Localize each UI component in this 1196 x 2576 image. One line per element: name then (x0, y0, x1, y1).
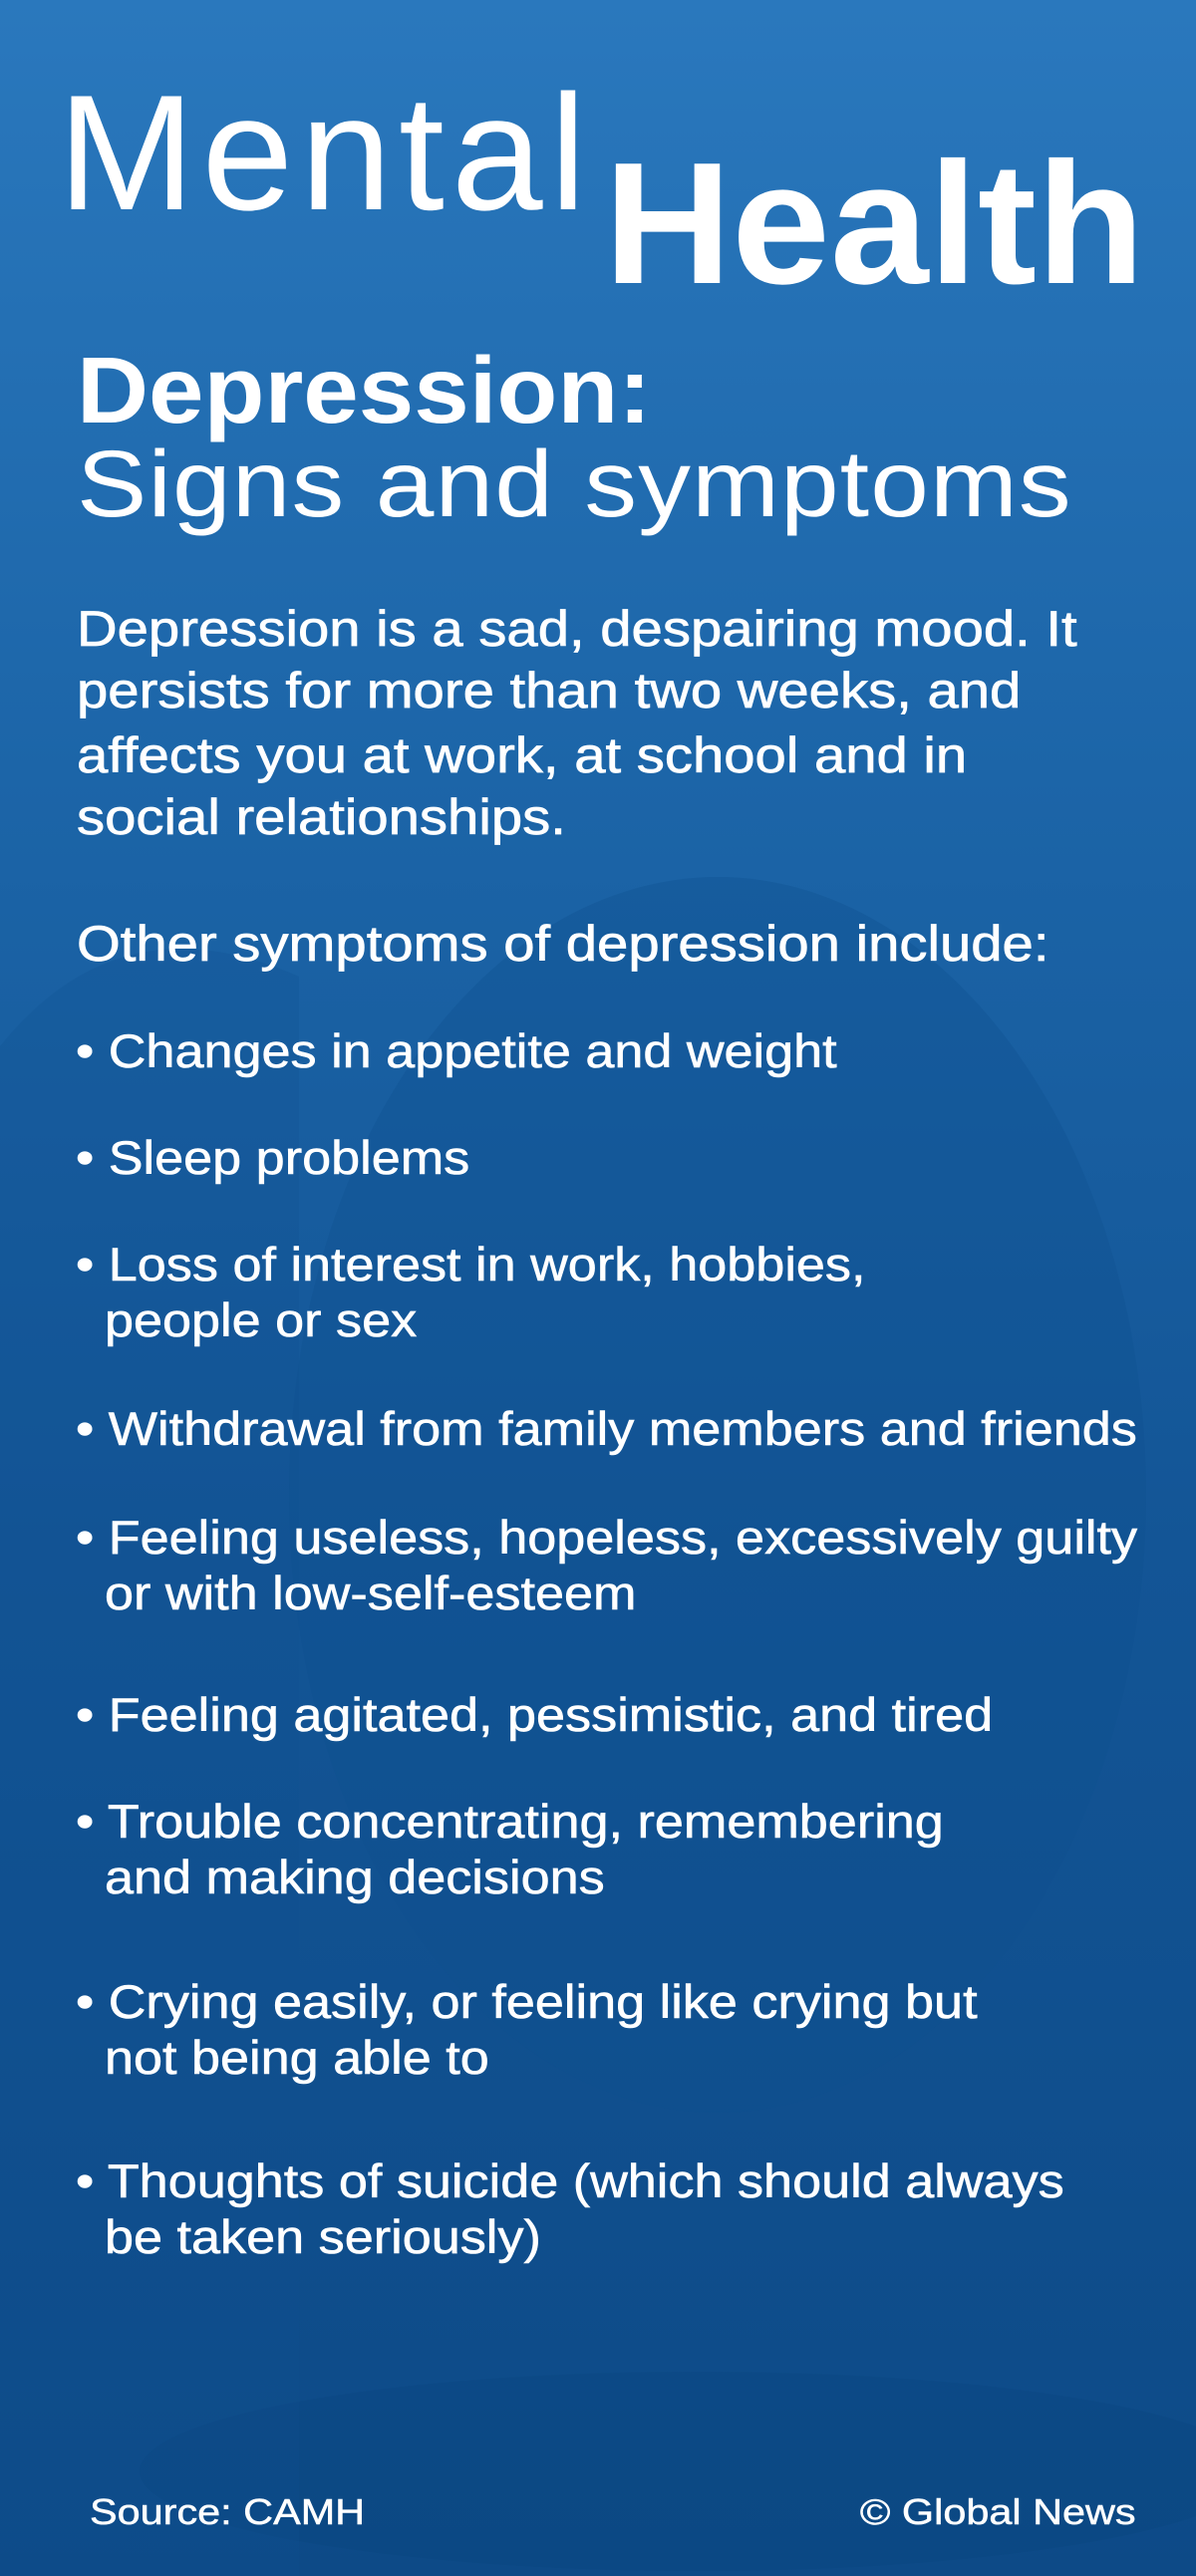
subtitle: Depression: Depression: (77, 338, 651, 443)
symptom list: • Thoughts of suicide (which should always (76, 2154, 1064, 2207)
title: Mental: Mental (58, 61, 593, 244)
intro paragraph: affects you at work, at school and in (77, 727, 967, 783)
symptom list: • Crying easily, or feeling like crying but (76, 1975, 978, 2028)
symptoms heading: Other symptoms of depression include: (77, 916, 1048, 972)
intro paragraph: persists for more than two weeks, and (77, 663, 1021, 718)
title: Health: Health (604, 126, 1144, 320)
symptom list: not being able to (105, 2031, 489, 2084)
symptom list: or with low-self-esteem (105, 1567, 636, 1619)
footer: credit: © Global News (860, 2491, 1136, 2532)
symptom list: • Withdrawal from family members and friends (76, 1402, 1137, 1455)
symptom list: • Feeling agitated, pessimistic, and tired (76, 1688, 993, 1741)
symptom list: • Loss of interest in work, hobbies, (76, 1238, 866, 1290)
intro paragraph: social relationships. (77, 789, 566, 845)
intro paragraph: Depression is a sad, despairing mood. It (77, 601, 1077, 657)
subtitle: Signs and symptoms: Signs and symptoms (77, 431, 1072, 537)
symptom list: • Trouble concentrating, remembering (76, 1795, 944, 1848)
symptom list: and making decisions (105, 1851, 605, 1903)
footer: source: Source: CAMH (90, 2491, 365, 2532)
symptom list: • Feeling useless, hopeless, excessively guilty (76, 1511, 1137, 1564)
symptom list: be taken seriously) (105, 2210, 541, 2263)
symptom list (76, 1024, 1138, 2264)
symptom list: • Sleep problems (76, 1131, 469, 1184)
symptom list: people or sex (105, 1293, 417, 1346)
symptom list: • Changes in appetite and weight (76, 1024, 837, 1077)
intro paragraph (77, 601, 1077, 845)
